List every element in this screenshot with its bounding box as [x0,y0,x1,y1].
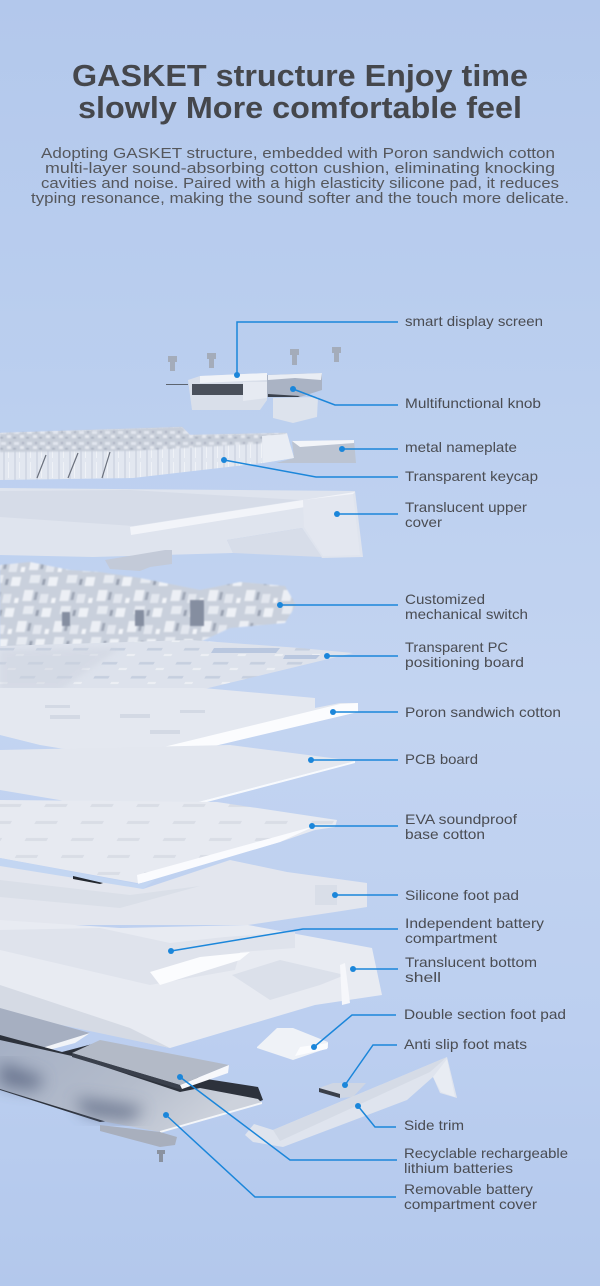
title: slowly More comfortable feel [78,91,522,125]
callout: recyclable rechargeable lithium batteries [177,1074,568,1176]
display screen module [166,373,267,410]
double section foot pad [257,1028,328,1060]
stabilizer parts [105,550,172,571]
transparent PC positioning board [0,640,353,700]
callout: double section foot pad: Double section foot pad [404,1006,566,1022]
title [72,59,528,125]
callout lines and labels [163,313,568,1212]
callout: side trim [355,1103,464,1133]
keycaps layer [0,427,294,480]
foot plate and screw [100,1125,177,1162]
callout: independent battery compartment: compartment [405,930,497,946]
translucent bottom shell [0,920,382,1048]
callout: metal nameplate: metal nameplate [405,439,517,455]
callout: translucent upper cover: Translucent upper [405,499,527,515]
callout: customized mechanical switch: Customized [405,591,485,607]
metal cover shading [0,1062,145,1120]
title: GASKET structure Enjoy time [72,59,528,93]
callout: translucent upper cover [334,499,527,530]
EVA soundproof base cotton [0,800,337,884]
callout: EVA soundproof base cotton: base cotton [405,826,485,842]
callout: customized mechanical switch [277,591,528,622]
intro text block: Adopting GASKET structure, embedded with Poron sandwich cotton [41,145,555,162]
recyclable lithium battery [72,1040,229,1090]
callout: recyclable rechargeable lithium batteries: lithium batteries [404,1160,513,1176]
callout: translucent bottom shell: Translucent bottom [405,954,537,970]
callout: translucent upper cover: cover [405,514,442,530]
callout: smart display screen: smart display screen [405,313,543,329]
multifunctional knob [267,373,322,423]
callout: EVA soundproof base cotton: EVA soundproof [405,811,517,827]
intro text block: typing resonance, making the sound softer and the touch more delicate. [31,190,569,207]
callout: anti slip foot mats [342,1036,527,1088]
mechanical switch layer [0,562,296,650]
callout: transparent PC positioning board [324,639,524,670]
callout: independent battery compartment [168,915,544,954]
callout: removable battery compartment cover [163,1112,537,1212]
callout: multifunctional knob: Multifunctional knob [405,395,541,411]
intro text block [31,145,569,207]
callout: translucent bottom shell: shell [405,969,441,985]
callout: smart display screen [234,313,543,378]
callout: removable battery compartment cover: Removable battery [404,1181,533,1197]
callout: EVA soundproof base cotton [309,811,517,842]
silicone foot pad [0,860,367,925]
intro text block: multi-layer sound-absorbing cotton cushion, eliminating knocking [45,160,555,177]
exploded keyboard diagram [0,347,457,1162]
callout: transparent PC positioning board: positioning board [405,654,524,670]
callout: recyclable rechargeable lithium batteries: Recyclable rechargeable [404,1145,568,1161]
poron sandwich cotton [0,688,358,763]
callout: poron sandwich cotton [330,704,561,720]
callout: poron sandwich cotton: Poron sandwich cotton [405,704,561,720]
callout: multifunctional knob [290,386,541,411]
callout: silicone foot pad: Silicone foot pad [405,887,519,903]
PCB board [0,745,355,817]
nameplate top edge [292,440,354,447]
metal nameplate [276,440,356,463]
callout: translucent bottom shell [350,954,537,985]
callout: side trim: Side trim [404,1117,464,1133]
callout: removable battery compartment cover: compartment cover [404,1196,537,1212]
side trim [245,1057,457,1147]
callout: independent battery compartment: Independent battery [405,915,544,931]
callout: customized mechanical switch: mechanical switch [405,606,528,622]
callout: PCB board: PCB board [405,751,478,767]
battery and metal plate layer [0,1008,263,1133]
callout: silicone foot pad [332,887,519,903]
blue gap [0,858,155,889]
callout: double section foot pad [311,1006,566,1050]
icon: screws [168,347,341,371]
callout: transparent keycap [221,457,538,484]
anti slip foot mats [319,1083,366,1098]
callout: metal nameplate [339,439,517,455]
callout: anti slip foot mats: Anti slip foot mats [404,1036,527,1052]
callout: transparent PC positioning board: Transparent PC [405,639,508,655]
callout: transparent keycap: Transparent keycap [405,468,538,484]
intro text block: cavities and noise. Paired with a high elasticity silicone pad, it reduces [41,175,559,192]
translucent upper cover [0,488,363,558]
callout: PCB board [308,751,478,767]
